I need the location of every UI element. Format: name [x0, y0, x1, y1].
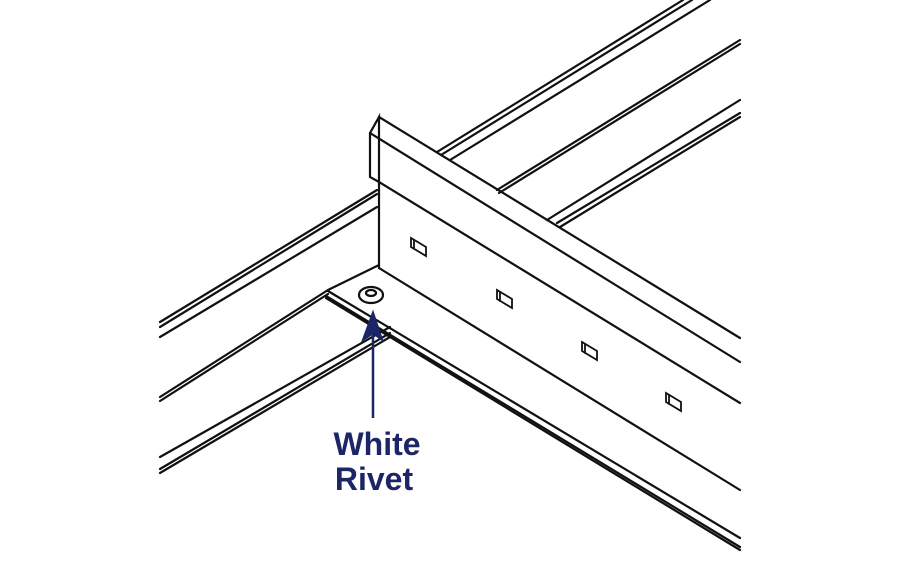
slots	[411, 238, 681, 411]
upper right cross tees	[437, 0, 740, 227]
left cross tee	[160, 190, 390, 473]
label: White Rivet: Rivet	[335, 461, 413, 497]
icon: white rivet	[359, 287, 383, 303]
arrow to rivet	[362, 311, 383, 418]
label: White Rivet: White	[333, 426, 421, 462]
main tee	[326, 117, 740, 550]
label: White Rivet	[333, 426, 421, 497]
